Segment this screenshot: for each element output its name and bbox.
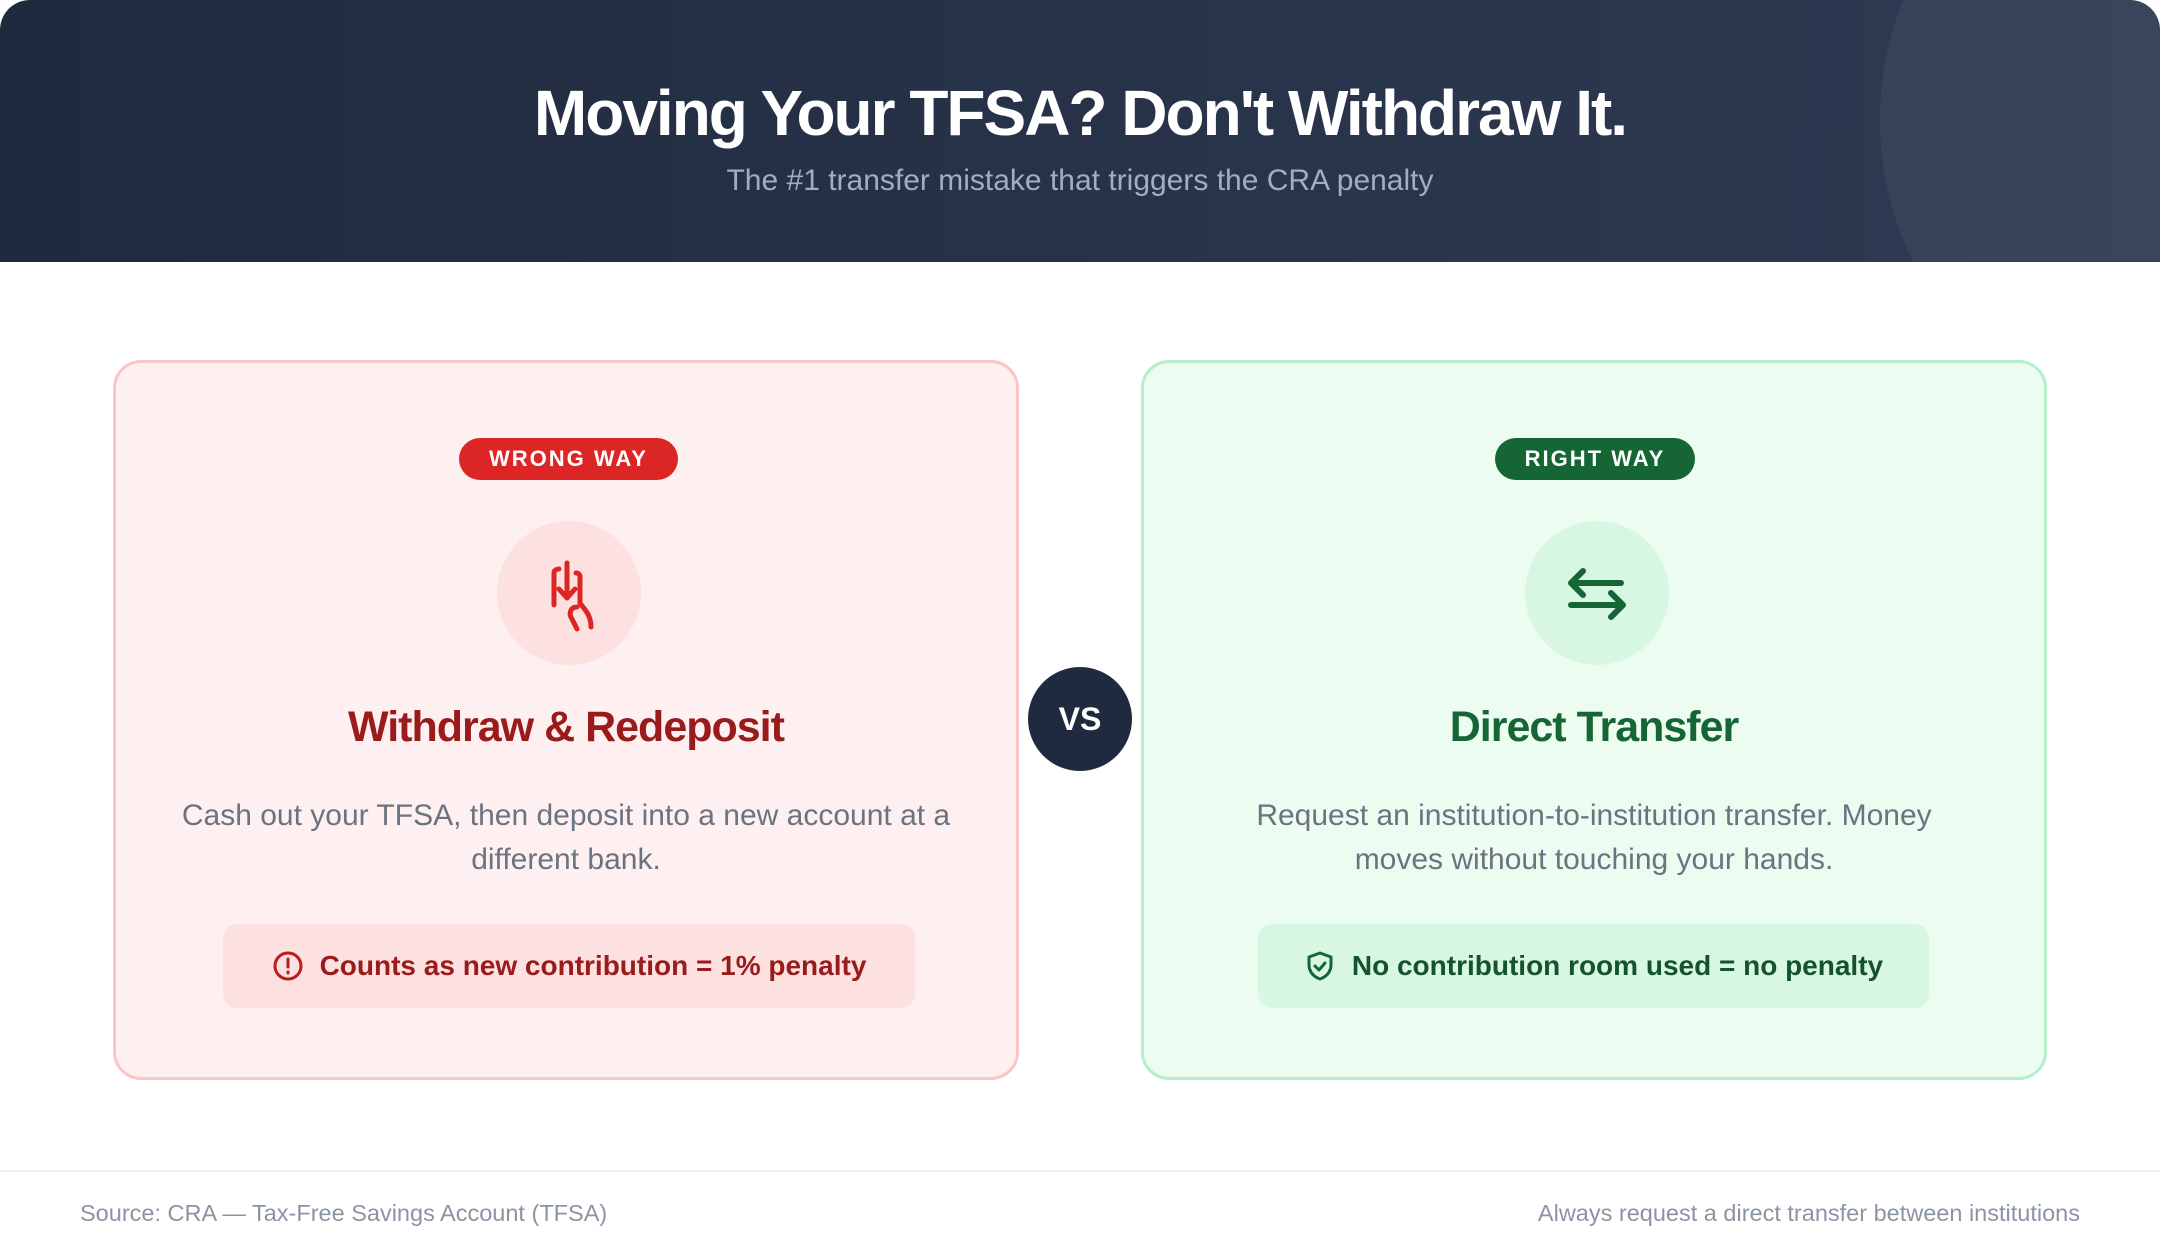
callout: no penalty: No contribution room used = no penalty xyxy=(1352,950,1883,981)
callout: no penalty xyxy=(1258,924,1929,1008)
vs marker: VS xyxy=(1059,701,1101,737)
callout: penalty xyxy=(223,924,915,1008)
description: Cash out your TFSA, then deposit into a new account at a different bank. xyxy=(182,799,950,876)
header xyxy=(0,0,2160,262)
panel: wrong way xyxy=(113,360,1019,1080)
icon: transfer arrows xyxy=(1525,521,1669,665)
icon: withdraw xyxy=(497,521,641,665)
description: Request an institution-to-institution transfer. Money moves without touching your hands. xyxy=(1256,799,1932,876)
panel: right way xyxy=(1141,360,2047,1080)
footer source: Source: CRA — Tax-Free Savings Account (TFSA) xyxy=(80,1200,607,1226)
subtitle: The #1 transfer mistake that triggers the CRA penalty xyxy=(726,164,1434,197)
callout: penalty: Counts as new contribution = 1% penalty xyxy=(320,950,866,981)
title: Moving Your TFSA? Don't Withdraw It. xyxy=(534,77,1626,149)
badge: wrong way: WRONG WAY xyxy=(489,446,648,471)
badge: wrong way xyxy=(459,438,678,480)
heading: Direct Transfer xyxy=(1450,703,1738,751)
vs marker xyxy=(1028,667,1132,771)
badge: right way xyxy=(1495,438,1695,480)
badge: right way: RIGHT WAY xyxy=(1525,446,1665,471)
footer note: Always request a direct transfer between institutions xyxy=(1538,1200,2080,1226)
heading: Withdraw & Redeposit xyxy=(348,703,784,751)
